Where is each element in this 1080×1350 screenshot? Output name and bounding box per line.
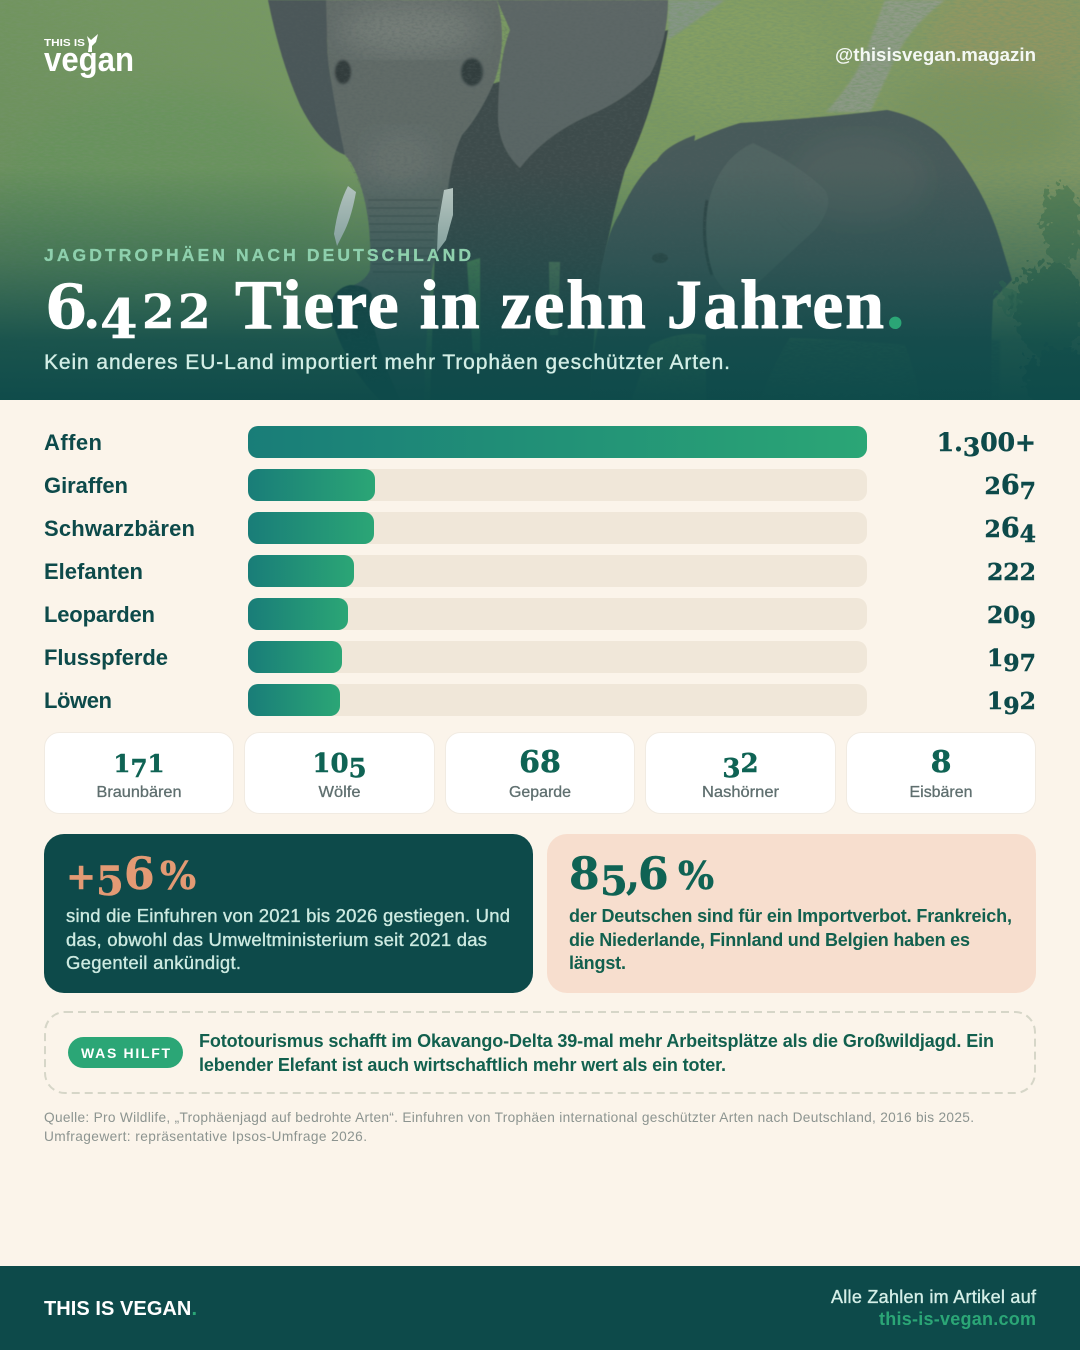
source note: Umfragewert: repräsentative Ipsos-Umfrage 2026. bbox=[44, 1129, 367, 1144]
footer link bbox=[831, 1287, 1037, 1329]
bar row: Leoparden: Leoparden bbox=[44, 602, 155, 627]
bush bbox=[993, 179, 1080, 352]
bar row: Löwen: Löwen bbox=[44, 688, 112, 713]
logo: This is vegan: THIS IS bbox=[44, 37, 85, 49]
stat card: Wölfe: 10 bbox=[312, 749, 349, 779]
pill: was hilft: WAS HILFT bbox=[81, 1045, 170, 1061]
eyebrow: JAGDTROPHÄEN NACH DEUTSCHLAND bbox=[44, 245, 471, 265]
bar row: Elefanten: Elefanten bbox=[44, 559, 143, 584]
social handle: @thisisvegan.magazin bbox=[835, 45, 1036, 65]
stat cards bbox=[44, 732, 1036, 814]
subtitle: Kein anderes EU-Land importiert mehr Trophäen geschützter Arten. bbox=[44, 351, 730, 374]
logo: This is vegan: vegan bbox=[44, 41, 134, 79]
stat card: Geparde: Geparde bbox=[509, 784, 571, 801]
callout: 85,6 %: der Deutschen sind für ein Importverbot. Frankreich, bbox=[569, 906, 1012, 926]
bar row: Affen: 00+ bbox=[980, 428, 1036, 457]
stat card: Wölfe: Wölfe bbox=[318, 784, 361, 801]
stat card: Nashörner bbox=[646, 732, 836, 814]
stat card: Nashörner: 2 bbox=[740, 749, 759, 779]
bar row: Affen: 3 bbox=[963, 433, 980, 462]
bar row: Schwarzbären bbox=[44, 512, 1036, 548]
callout: +56 % bbox=[44, 834, 533, 993]
callout: was hilft: Fototourismus schafft im Okavango-Delta 39-mal mehr Arbeitsplätze als die Großwildjagd. Ein bbox=[199, 1031, 994, 1051]
bar row: Elefanten bbox=[44, 555, 1036, 587]
title: Tiere in zehn Jahren bbox=[235, 267, 884, 344]
title: 4 bbox=[100, 287, 138, 351]
callout: 85,6 %: % bbox=[678, 853, 714, 898]
bar row: Löwen bbox=[44, 684, 1036, 720]
stat card: Wölfe: 5 bbox=[349, 754, 367, 784]
bar row: Schwarzbären: Schwarzbären bbox=[44, 516, 195, 541]
stat card: Wölfe bbox=[244, 732, 434, 814]
bar row: Leoparden: 20 bbox=[987, 601, 1020, 629]
callout: 85,6 %: 6 bbox=[638, 849, 669, 900]
bar row: Affen bbox=[44, 426, 1036, 462]
bar row: Giraffen: 26 bbox=[984, 470, 1020, 501]
source note: Quelle: Pro Wildlife, „Trophäenjagd auf bedrohte Arten“. Einfuhren von Trophäen international geschützter Arten nach Deutschland, 2016 bis 2025. bbox=[44, 1110, 974, 1125]
callout: was hilft bbox=[45, 1012, 1035, 1093]
callout: 85,6 %: 5 bbox=[600, 858, 628, 905]
footer link: Alle Zahlen im Artikel auf bbox=[831, 1287, 1037, 1307]
bar row: Flusspferde: 97 bbox=[1003, 649, 1036, 677]
callout: +56 %: sind die Einfuhren von 2021 bis 2026 gestiegen. Und bbox=[66, 905, 510, 926]
callout: +56 %: 6 bbox=[124, 849, 155, 900]
bar row: Elefanten: 222 bbox=[987, 558, 1036, 586]
baby elephant bbox=[596, 110, 1012, 348]
callout: +56 %: 5 bbox=[96, 858, 124, 905]
footer link: this-is-vegan.com bbox=[879, 1309, 1036, 1329]
stat card: Braunbären: Braunbären bbox=[96, 784, 182, 801]
bar row: Leoparden: 9 bbox=[1020, 606, 1036, 634]
bar row: Affen: Affen bbox=[44, 430, 102, 455]
tusks bbox=[334, 186, 453, 252]
callout: 85,6 %: längst. bbox=[569, 953, 626, 973]
title: 2 bbox=[142, 285, 175, 340]
stat card: Braunbären: 1 bbox=[148, 749, 165, 778]
bar row: Affen: 1. bbox=[937, 428, 963, 457]
stat card: Eisbären: Eisbären bbox=[910, 784, 972, 801]
bar row: Leoparden bbox=[44, 598, 1036, 634]
callout: was hilft: lebender Elefant ist auch wirtschaftlich mehr wert als ein toter. bbox=[199, 1055, 726, 1075]
stat card: Braunbären bbox=[44, 732, 234, 814]
bar row: Giraffen: Giraffen bbox=[44, 473, 128, 498]
adult elephant bbox=[268, 0, 668, 400]
bar row: Giraffen: 7 bbox=[1020, 477, 1036, 505]
bar row: Flusspferde bbox=[44, 641, 1036, 677]
callout: +56 %: Gegenteil ankündigt. bbox=[66, 952, 241, 973]
stat card: Geparde: 68 bbox=[519, 745, 561, 780]
stat card: Braunbären: 7 bbox=[130, 754, 148, 783]
bar row: Flusspferde: 1 bbox=[987, 644, 1003, 672]
callout: 85,6 %: die Niederlande, Finnland und Belgien haben es bbox=[569, 930, 970, 950]
callout: 85,6 %: , bbox=[626, 852, 640, 899]
hero photo: elephants on grass bbox=[0, 0, 1080, 412]
bar row: Schwarzbären: 26 bbox=[984, 513, 1020, 544]
title: 2 bbox=[178, 285, 211, 340]
stat card: Eisbären bbox=[846, 732, 1036, 814]
source note bbox=[44, 1110, 974, 1144]
bar chart bbox=[44, 426, 1036, 720]
callout: +56 %: + bbox=[66, 856, 96, 898]
bar row: Schwarzbären: 4 bbox=[1020, 520, 1036, 548]
footer brand: THIS IS VEGAN. bbox=[44, 1298, 197, 1320]
bar row: Löwen: 2 bbox=[1020, 687, 1036, 715]
pill: was hilft bbox=[68, 1037, 183, 1068]
callout: 85,6 % bbox=[547, 834, 1036, 993]
stat card: Eisbären: 8 bbox=[931, 745, 951, 780]
bar row: Löwen: 9 bbox=[1003, 692, 1020, 720]
title: . bbox=[83, 281, 100, 340]
stat card: Geparde bbox=[446, 732, 634, 814]
bar row: Flusspferde: Flusspferde bbox=[44, 645, 168, 670]
callout: +56 %: % bbox=[160, 853, 196, 898]
footer bbox=[0, 1266, 1080, 1350]
elephant skin texture bbox=[338, 0, 508, 183]
stat card: Nashörner: 3 bbox=[722, 754, 740, 784]
stat card: Nashörner: Nashörner bbox=[702, 784, 780, 801]
bar row: Löwen: 1 bbox=[987, 687, 1003, 715]
title: 6 bbox=[45, 272, 87, 343]
callout: +56 %: das, obwohl das Umweltministerium seit 2021 das bbox=[66, 929, 487, 950]
title: . bbox=[886, 261, 905, 345]
stat card: Braunbären: 1 bbox=[113, 749, 130, 778]
callout: 85,6 %: 8 bbox=[569, 849, 600, 900]
bar row: Giraffen bbox=[44, 469, 1036, 505]
